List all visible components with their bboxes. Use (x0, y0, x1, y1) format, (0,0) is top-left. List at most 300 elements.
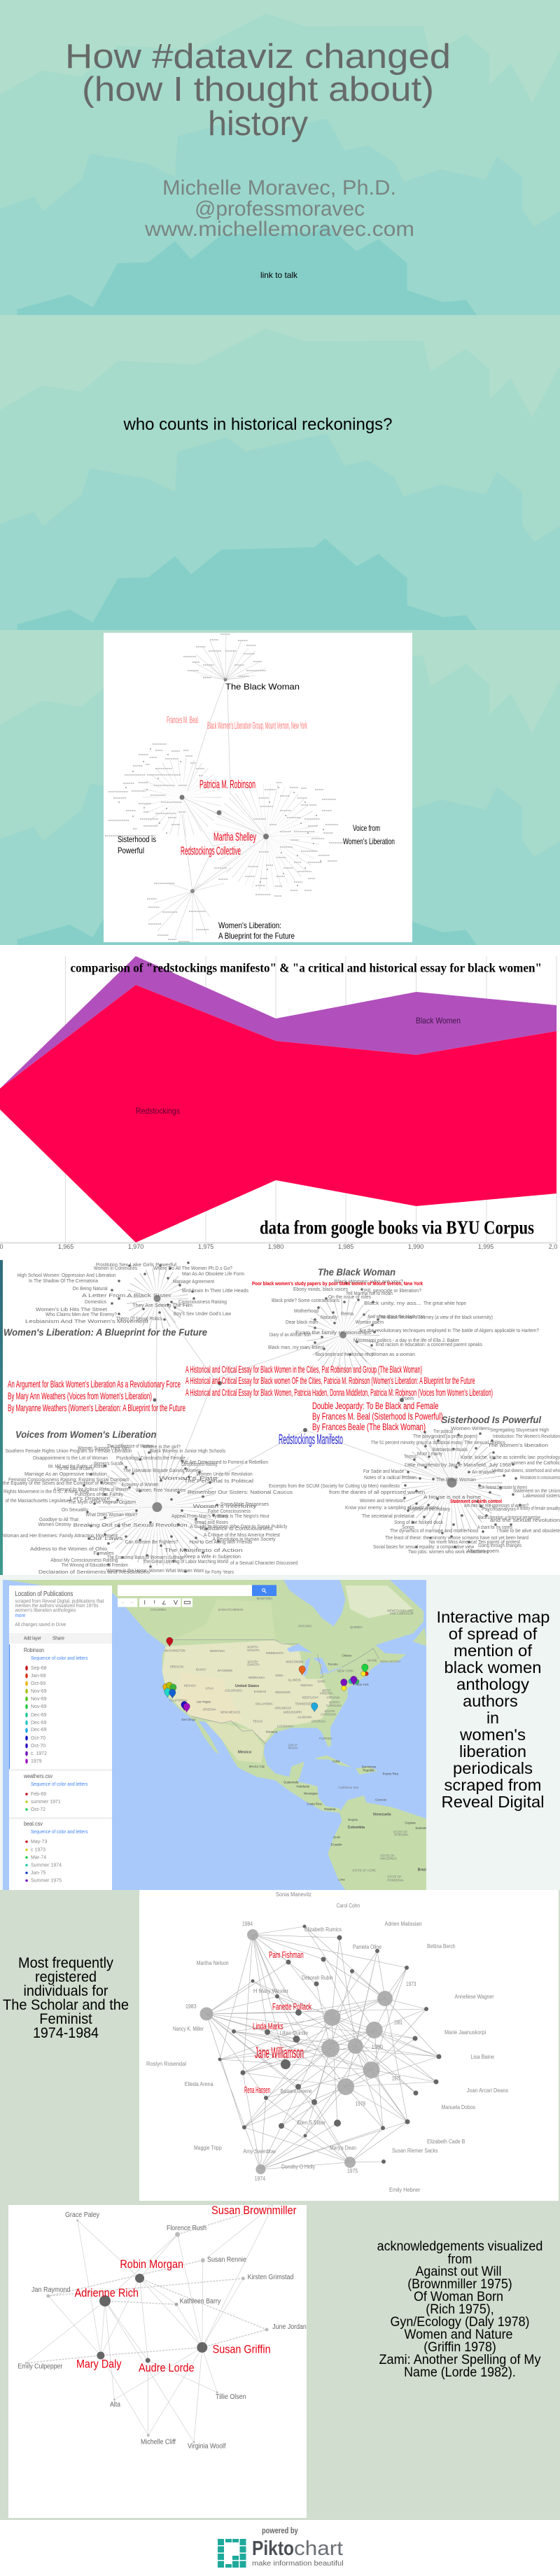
essay titles: Voices cluster (3, 1444, 298, 1575)
essay titles: Sisterhood cluster: Must I marry (417, 1452, 442, 1457)
map labels: MANITOBA (257, 1597, 272, 1600)
axis labels: 1,990 (408, 1243, 424, 1250)
acknowledgement grey labels: Susan Rennie (207, 2256, 246, 2264)
acknowledgement red labels: Susan Brownmiller (211, 2204, 297, 2217)
person labels: Ellen S Silber (297, 2120, 326, 2126)
map labels: NEVADA (184, 1684, 196, 1688)
essay titles: Sisterhood cluster: Notes of a radical lesbian (364, 1476, 416, 1480)
essay titles: Sisterhood cluster: Women Writers (451, 1427, 491, 1432)
legend: Robinson layer: Dec-69 (31, 1713, 47, 1718)
essay titles: Voices cluster: Southern Female Rights Union Program for Female Liberation (6, 1449, 132, 1454)
essay titles: Sisterhood cluster: A chant for my sisters (477, 1525, 512, 1530)
map labels: Colombia (348, 1826, 365, 1830)
map labels: Gulf of (288, 1743, 298, 1746)
author labels in red: Frances M. Beal (167, 714, 198, 725)
essay titles: The Black Woman cluster: Black pride? Some contradictions (272, 1298, 340, 1303)
map labels: LOUISIANA (277, 1725, 293, 1728)
title (65, 38, 451, 143)
person labels: Pamela Oline (353, 1944, 382, 1950)
legend: Robinson layer: Dec-69 (31, 1721, 47, 1726)
essay titles: Sisterhood cluster: For Sadie and Maude (363, 1469, 404, 1474)
link to talk: link to talk (260, 270, 298, 280)
person labels: Barbara Greene (280, 2088, 312, 2094)
map sidebar: scraped from Reveal Digital, publications that (15, 1599, 104, 1604)
axis labels (0, 1243, 557, 1250)
map labels: Puerto Rico (383, 1772, 399, 1775)
panel: publication network: Redstockings Manifesto (279, 1432, 343, 1448)
legend: Robinson layer: c. 1972 (31, 1751, 47, 1756)
map sidebar (9, 1586, 112, 1890)
caption: most frequently registered: individuals for (24, 1983, 108, 1999)
legend: Robinson layer: Nov-69 (31, 1704, 47, 1709)
person labels: 1981 (394, 2019, 402, 2026)
axis labels: 1,995 (478, 1243, 493, 1250)
map labels: MISSISSIPPI (284, 1711, 302, 1714)
essay titles: The Black Woman cluster: Mississippi politics - a day in the life of Ella J. Baker (354, 1338, 460, 1343)
hub: The Black Woman burst (183, 634, 266, 682)
map labels: Nicaragua (304, 1792, 318, 1795)
legend: beal layer: Summer 1974 (31, 1863, 62, 1868)
essay titles: Women's Liberation cluster: Lesbianism And The Women's Movement (25, 1320, 148, 1324)
cluster headings: Women's Liberation: A Blueprint for the Future (4, 1326, 207, 1338)
map labels: INDIANA (300, 1684, 313, 1687)
hub: Sisterhood is Powerful burst (105, 744, 204, 836)
map labels: UTAH (205, 1687, 214, 1690)
acknowledgements caption: Name (Lorde 1982). (404, 2365, 516, 2380)
map labels: Dominican (362, 1765, 377, 1769)
map labels: WEST (322, 1689, 331, 1693)
essay titles: Women's Liberation cluster: Women in Communes (94, 1266, 137, 1271)
panel: publication network (0, 1260, 560, 1575)
person labels: 1975 (347, 2168, 358, 2174)
essay titles: The Black Woman cluster: End racism in education: a concerned parent speaks (376, 1343, 482, 1348)
acknowledgements caption: (Brownmiller 1975) (407, 2277, 512, 2292)
person labels: 1974 (255, 2176, 265, 2182)
essay titles: Women's Liberation cluster: Man As An Obsolete Life Form (182, 1272, 244, 1277)
essay titles: The Black Woman cluster (268, 1280, 539, 1401)
acknowledgements caption: (Rich 1975), (426, 2302, 494, 2317)
acknowledgement red labels: Robin Morgan (120, 2258, 183, 2271)
network bursts (84, 1263, 520, 1572)
legend: beal layer: Summer 1975 (31, 1879, 62, 1883)
essay titles: Voices cluster: Keep a Wife in Subjection (184, 1555, 241, 1560)
title: How #dataviz changed (65, 38, 451, 76)
legend: beal layer: c 1973 (31, 1848, 46, 1852)
essay titles: Voices cluster: Psychology Constructs the Female (116, 1456, 186, 1461)
legend: Robinson layer: Jan-69 (31, 1674, 46, 1679)
essay titles: Sisterhood cluster: Know your enemy: a sampling of sexist quotes (345, 1506, 439, 1511)
essay titles: Voices cluster: Economy of Women (122, 1483, 159, 1488)
essay titles: Women's Liberation cluster: Who Claims Men Are The Enemy? (46, 1312, 117, 1317)
year hubs (200, 1929, 393, 2174)
axis labels: 2,0 (549, 1243, 557, 1250)
legend: weathers layer (23, 1773, 88, 1812)
map labels: CAROLINA (321, 1712, 337, 1716)
essay titles: Women's Liberation cluster: In The Shadow Of The Crematoria (29, 1279, 98, 1284)
essay titles: Sisterhood cluster: Are men the real oppressors of women? (464, 1504, 528, 1508)
map caption: mention of (454, 1642, 533, 1660)
essay titles: Voices cluster: A Revolution in Human Society (213, 1537, 276, 1542)
essay titles: The Black Woman cluster: On the issue of roles (328, 1295, 371, 1300)
map caption: black women (444, 1658, 542, 1676)
map labels: QUEBEC (350, 1625, 363, 1629)
essay titles: Voices cluster: Address to the Women of Ohio (30, 1547, 107, 1552)
essay titles: Women's Liberation cluster: On Being Natural (73, 1287, 108, 1292)
essay titles: Sisterhood cluster: The 51 percent minority group: a statistical essay (371, 1441, 462, 1446)
anthology labels: Women's Liberation: (218, 920, 281, 930)
essay titles: Sisterhood cluster (269, 1427, 560, 1555)
title: (how I thought about) (82, 71, 434, 108)
map labels: Bogota (348, 1818, 358, 1821)
essay titles: Voices cluster: Our Laws (90, 1536, 123, 1541)
panel: title slide (0, 0, 560, 315)
panel: acknowledgements network (8, 2204, 542, 2518)
caption: most frequently registered: Most frequently (18, 1955, 113, 1971)
footer: powered by Piktochart (0, 2520, 560, 2576)
essay titles: Voices cluster: Goodbye to All That (39, 1518, 78, 1522)
essay titles: The Black Woman cluster: Woman as a woman (372, 1352, 415, 1357)
map (3, 1580, 428, 1890)
acknowledgement red labels: Audre Lorde (139, 2361, 195, 2374)
person labels: 1978 (356, 2101, 365, 2107)
anthology labels: Voice from (353, 823, 380, 833)
essay titles: Women's Liberation cluster: Women's Lib Hits The Street (36, 1308, 107, 1312)
map labels: DAKOTA (247, 1648, 260, 1652)
series labels: Redstockings (136, 1106, 180, 1116)
acknowledgements caption: (Griffin 1978) (424, 2340, 496, 2355)
map labels: NORTH (329, 1700, 340, 1704)
essay titles: Voices cluster: Women, Free Yourselves (136, 1488, 186, 1493)
map labels: IDAHO (196, 1667, 206, 1671)
highlighted names: Jane Williamson (255, 2044, 304, 2062)
small red labels (252, 1280, 502, 1504)
essay titles: Voices cluster: The Personal Is Political (184, 1479, 254, 1484)
map labels: NEBRASKA (248, 1676, 265, 1679)
essay titles: Sisterhood cluster: Excerpts from the SCUM (Society for Cutting Up Men) manifesto (269, 1484, 400, 1489)
map labels: ARIZONA (202, 1707, 216, 1711)
map labels: GEORGIA (312, 1719, 326, 1723)
essay titles: Voices cluster: How to Get Along with Friends (189, 1540, 253, 1545)
essay titles: Voices cluster: Women Support Their Men (78, 1446, 130, 1451)
essay titles: Sisterhood cluster: An analysis (472, 1470, 495, 1475)
essay titles: Voices cluster: A Guide to Women Who Dare to Speak Publicly (190, 1525, 288, 1530)
axis labels: 1,970 (128, 1243, 144, 1250)
footer: powered by Piktochart: powered by (262, 2526, 298, 2535)
panel: registered individuals network (0, 1890, 560, 2520)
essay titles: Sisterhood cluster: Psychoanalysis (482, 1507, 517, 1512)
map labels: DAKOTA (247, 1663, 260, 1667)
map labels (150, 1597, 428, 1882)
person labels: Sonia Manevitz (276, 1891, 312, 1898)
essay titles: Sisterhood cluster: Segregating Stuyvesant High (490, 1428, 549, 1433)
essay titles: The Black Woman cluster: Pill, genocide or liberation? (364, 1289, 421, 1294)
hub: Voices from Women's Liberation burst (217, 783, 343, 896)
map labels: OHIO (317, 1680, 326, 1684)
essay titles: The Black Woman cluster: Black people and the Victorian ethos (315, 1352, 374, 1357)
person labels: Mary's Dean (330, 2145, 356, 2151)
map labels: COLUMBIA (150, 1608, 167, 1611)
essay titles: Women's Liberation cluster: They Are Seeing The Film (132, 1303, 192, 1308)
map labels: Mexico City (249, 1765, 265, 1768)
author labels in red: Martha Shelley (214, 830, 256, 844)
essay titles: Sisterhood cluster: and the sexual revolution (490, 1518, 560, 1523)
essay titles: Sisterhood cluster: Going through changes (478, 1544, 522, 1548)
map labels: Guyana (405, 1821, 416, 1824)
person labels: 1983 (186, 2003, 197, 2010)
map labels: Guatemala (284, 1781, 299, 1784)
essay titles: Voices cluster: The Myth of the Vaginal Orgasm (68, 1500, 136, 1505)
person labels: Maggie Tripp (194, 2145, 222, 2151)
essay titles: Voices cluster: Breaking Out of the Sexual Revolution (74, 1523, 188, 1528)
essay titles: Voices cluster: Woman and Her Enemies: Family Attraction Movement (3, 1534, 118, 1539)
essay titles: Women's Liberation cluster: Bird-brain In Their Little Heads (182, 1289, 248, 1294)
caption: most frequently registered (3, 1955, 129, 2041)
essay titles: Sisterhood cluster: Barbarous rituals (433, 1448, 468, 1452)
acknowledgement grey labels: Florence Rush (167, 2225, 206, 2232)
person labels: Martha Nelson (197, 1960, 229, 1966)
footer: powered by Piktochart: make information beautiful (252, 2560, 344, 2568)
essay titles: Voices cluster: A Critique of the Miss America Protest (204, 1533, 280, 1538)
map labels: WISCONSIN (286, 1660, 303, 1664)
area: Redstockings (0, 985, 556, 1242)
essay titles: Voices cluster: Black Is The Negro's Hour (218, 1514, 270, 1519)
essay titles: Voices cluster: Resistance to Consciousness (200, 1527, 273, 1532)
essay titles: Voices cluster: The Indifference of Women (107, 1444, 153, 1449)
anthology labels (118, 682, 395, 941)
area: Black Women (0, 956, 556, 1088)
acknowledgements caption: from (448, 2253, 472, 2267)
series labels (136, 1016, 461, 1116)
map labels: Ecuador (331, 1843, 342, 1847)
map labels: TENNESSEE (295, 1702, 314, 1706)
essay titles: Sisterhood cluster: Woman in the military (408, 1507, 450, 1512)
essay titles: Sisterhood cluster: Little manifesto by Jayne Mansfield, July 1968 (405, 1463, 511, 1468)
acknowledgement red labels: Mary Daly (76, 2358, 122, 2370)
panel: anthology network slide (0, 630, 560, 945)
legend: Robinson layer: Nov-69 (31, 1689, 47, 1694)
network image: anthology authors: Black Women's Liberation Group, Mount Vernon, New York (207, 720, 307, 731)
legend: beal layer: beal.csv (24, 1821, 43, 1827)
acknowledgement red labels: Susan Griffin (213, 2342, 271, 2356)
acknowledgement grey labels: June Jordan (272, 2323, 307, 2331)
person labels: Lillian Quintile (280, 2030, 308, 2036)
essay titles: Voices cluster: What Does Woman Want? (85, 1513, 137, 1518)
essay titles: Voices cluster: the Equality of the Sexes and the Condition of Women (3, 1481, 116, 1486)
map labels: SOUTH (247, 1660, 258, 1663)
essay titles: Voices cluster: Rights Movement in the U.S.: A New View (4, 1490, 90, 1494)
cluster headings (4, 1266, 542, 1440)
series labels: Black Women (416, 1016, 461, 1026)
acknowledgement grey labels: Grace Paley (65, 2211, 99, 2219)
map labels: AND LABRADOR (390, 1612, 414, 1616)
essay titles: Sisterhood cluster: Abortion poem (467, 1549, 499, 1554)
essay titles: Voices cluster: Black Women in Junior High Schools (150, 1449, 225, 1454)
map labels: MINNESOTA (266, 1651, 284, 1655)
legend: Robinson layer (24, 1647, 88, 1764)
acknowledgement grey labels: Alta (110, 2401, 120, 2409)
legend: beal layer (24, 1821, 88, 1883)
map labels: WYOMING (218, 1669, 233, 1672)
search bar (118, 1585, 276, 1607)
essay titles: Voices cluster: About My Consciousness Raising (50, 1558, 118, 1563)
author block: Michelle Moravec, Ph.D. (162, 176, 396, 200)
essay titles: The Black Woman cluster: Black unity, my ass... (364, 1301, 421, 1306)
title: history (208, 105, 308, 143)
author labels in red (167, 714, 307, 858)
acknowledgement edges (26, 2205, 273, 2442)
highlighted names: Fanette Pollack (272, 2001, 312, 2012)
map sidebar: All changes saved in Drive (15, 1623, 66, 1628)
essay titles: Voices cluster: Marriage As an Oppressive Institution (24, 1472, 107, 1477)
map labels: COLORADO (225, 1689, 242, 1693)
person labels: Susan Riemer Sacks (392, 2148, 438, 2154)
essay titles: The Black Woman cluster: Reena (341, 1312, 354, 1317)
essay titles: Voices cluster: For the Sake of Liberty (57, 1466, 94, 1471)
map labels: Costa Rica (307, 1802, 322, 1806)
footer: powered by Piktochart: Pikto (252, 2538, 294, 2560)
axis labels: 1,965 (58, 1243, 74, 1250)
essay titles: Sisterhood cluster: A House is not a home (424, 1495, 481, 1500)
acknowledgement grey labels: Kathleen Barry (180, 2297, 220, 2306)
map labels: Cuba (332, 1759, 340, 1763)
map labels: Ottawa (342, 1653, 352, 1657)
map labels: KANSAS (254, 1690, 266, 1693)
red citation labels: By Frances M. Beal (Sisterhood Is Powerful) (312, 1410, 443, 1422)
map caption: of spread of (449, 1625, 538, 1643)
map labels: VIRGINIA (320, 1692, 333, 1695)
essay titles: Voices cluster: of the Massachusetts Legislature (6, 1499, 71, 1504)
person labels: H Mary Wexler (253, 1988, 288, 1994)
map pins (163, 1637, 368, 1712)
map sidebar: women's liberation anthologies (14, 1609, 76, 1613)
map sidebar: mention the authors visualized from 1970s (15, 1604, 99, 1609)
legend: beal layer: Sequence of color and letters (31, 1830, 88, 1835)
essay titles: Voices cluster: Functions of the Family (75, 1492, 123, 1497)
acknowledgement red labels: Adrienne Rich (75, 2286, 139, 2300)
map labels: OREGON (170, 1665, 183, 1668)
essay titles: Voices cluster: Bread and Roses (195, 1520, 228, 1525)
caption: most frequently registered: The Scholar and the (3, 1997, 129, 2013)
essay titles: Voices cluster: Women's Suicide (94, 1462, 123, 1466)
essay titles: Voices cluster: Women Destroy (38, 1522, 71, 1527)
map labels: Panama (324, 1807, 336, 1811)
essay titles: Voices cluster: of a Sexual Character Discussed (230, 1561, 298, 1566)
map labels: CAROLINA (326, 1704, 342, 1707)
essay titles: Voices cluster: Appeal From Man's Tyranny (172, 1514, 228, 1519)
map labels: RONDONIA (387, 1878, 404, 1882)
person nodes (218, 1925, 441, 2164)
red citation labels: By Mary Ann Weathers (Voices from Women's Liberation) (8, 1390, 152, 1401)
person labels (146, 1891, 508, 2193)
acknowledgement red labels (75, 2204, 297, 2374)
essay titles: Sisterhood cluster: Terms (404, 1455, 416, 1460)
person labels: Elizabeth Rumics (304, 1926, 342, 1933)
red citation labels: Double Jeopardy: To Be Black and Female (312, 1400, 439, 1411)
map labels: New York (356, 1683, 369, 1686)
map labels: SASKATCHEWAN (218, 1608, 244, 1611)
map labels: Honduras (296, 1784, 309, 1788)
map labels: United States (235, 1684, 259, 1688)
person labels: 1984 (242, 1921, 253, 1927)
map labels: San Diego (181, 1718, 196, 1721)
essay titles: Sisterhood cluster: The playground (a prose poem) (413, 1434, 477, 1439)
anthology labels: Women's Liberation (343, 836, 395, 846)
cluster headings: The Black Woman (318, 1266, 396, 1278)
legend: weathers layer: Feb-69 (31, 1792, 46, 1797)
essay titles: The Black Woman cluster: The great white hope (424, 1301, 466, 1306)
map labels: ALABAMA (298, 1715, 312, 1718)
person labels: Elleda Arena (185, 2081, 214, 2087)
essay titles: The Black Woman cluster: Dear black man (286, 1320, 318, 1325)
author block (144, 176, 414, 241)
essay titles: The Black Woman cluster: Poem (402, 1396, 414, 1401)
map labels: Caracas (375, 1798, 386, 1801)
acknowledgement grey labels: Jan Raymond (31, 2286, 70, 2294)
essay titles: Voices cluster: Women's Inferiority (193, 1504, 257, 1509)
acknowledgements caption: acknowledgements visualized (377, 2239, 542, 2254)
chart title: comparison of "redstockings manifesto" & "a critical and historical essay for black women" (70, 960, 542, 974)
anthology labels: Sisterhood is (118, 834, 156, 844)
map labels: Mexico (238, 1751, 252, 1755)
essay titles: Women's Liberation cluster: Boy's Sex Under God's Law (174, 1312, 232, 1317)
small red labels: Poor black women's study papers by poor black women of Mount Vernon, New York (252, 1280, 424, 1287)
essay titles: Sisterhood cluster: The Black Woman (436, 1478, 476, 1483)
acknowledgements caption: Gyn/Ecology (Daly 1978) (391, 2315, 529, 2330)
axis labels: 1,980 (268, 1243, 284, 1250)
map caption: scraped from (444, 1776, 542, 1794)
essay titles: Sisterhood cluster: from the diaries of all oppressed women (329, 1490, 425, 1495)
map labels: CALIFORNIA (169, 1699, 188, 1702)
map labels: NOVA SCOTIA (380, 1660, 400, 1663)
map labels: Toronto (328, 1662, 338, 1666)
acknowledgement grey labels: Michelle Cliff (141, 2439, 176, 2446)
map labels: STATE OF (387, 1875, 402, 1879)
map labels: MAINE (368, 1659, 377, 1662)
essay titles: Sisterhood cluster: The dynamics of marriage and motherhood (390, 1529, 478, 1534)
map labels: MONTANA (210, 1649, 225, 1653)
footer: powered by Piktochart: chart (294, 2538, 343, 2560)
essay titles: Voices cluster: Females (94, 1551, 114, 1556)
highlighted names: Linda Marks (253, 2021, 284, 2031)
map labels: ILLINOIS (288, 1679, 301, 1682)
map labels: TEXAS (253, 1720, 262, 1723)
map labels: IOWA (275, 1674, 284, 1677)
essay titles: Voices cluster: Women in the Home: Women What Women Want (106, 1569, 204, 1574)
map labels: Caribbean Sea (338, 1786, 359, 1789)
anthology labels: A Blueprint for the Future (218, 931, 295, 941)
anthology labels: The Black Woman (225, 682, 300, 692)
essay titles: Sisterhood cluster: Songs (402, 1525, 414, 1530)
essay titles: Voices cluster: False Consciousness (208, 1509, 251, 1514)
acknowledgement nodes (25, 2219, 268, 2443)
person labels: Joan Arcari Deans (467, 2087, 508, 2094)
acknowledgements caption: Against out Will (416, 2264, 501, 2279)
caption: most frequently registered: Feminist (39, 2011, 92, 2027)
acknowledgement grey labels: Tillie Olsen (216, 2393, 246, 2401)
highlighted names: Rena Hansen (244, 2085, 270, 2095)
map labels: Venezuela (373, 1813, 391, 1817)
essay titles: The Black Woman cluster: Naturally (321, 1315, 337, 1320)
red citation labels: An Argument for Black Women's Liberation As a Revolutionary Force (8, 1378, 181, 1390)
axis labels: 1,985 (338, 1243, 354, 1250)
map labels: KENTUCKY (302, 1695, 318, 1699)
person labels: Carol Cohn (337, 1903, 360, 1909)
map labels: STATE OF (393, 1830, 408, 1833)
person labels: Anneliese Wagner (455, 1994, 494, 2000)
essay titles: Sisterhood cluster: Lakewood sisters (523, 1494, 560, 1499)
map labels: Las Vegas (197, 1700, 211, 1704)
essay titles: Sisterhood cluster: The secretarial proletariat (362, 1514, 414, 1519)
